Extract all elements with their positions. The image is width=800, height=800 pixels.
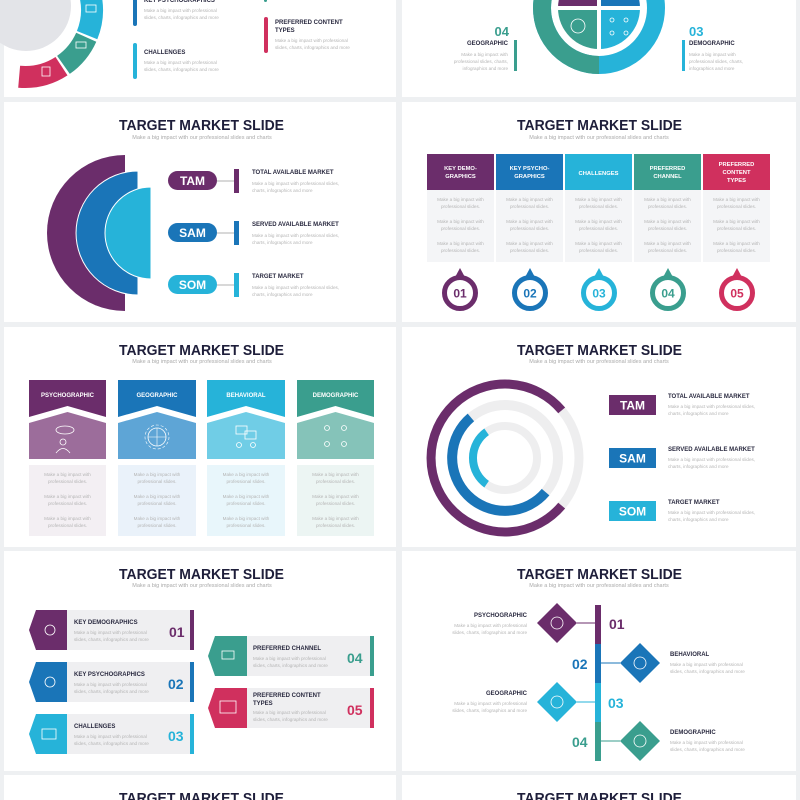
item 05: PREFERRED CONTENT — [253, 693, 321, 699]
card: demographic: Make a big impact with — [312, 494, 359, 499]
drop markers 01-05: 05 — [730, 286, 744, 300]
step 03 geographic: Make a big impact with professional — [454, 701, 527, 706]
item: SAM: Make a big impact with professional slides, — [252, 233, 339, 238]
item 05: slides, charts, infographics and more — [253, 717, 328, 722]
card: psychographic: PSYCHOGRAPHIC — [41, 393, 95, 399]
table: KEY DEMO- — [444, 166, 477, 172]
card: behavioral: professional slides. — [226, 523, 266, 528]
item 03: slides, charts, infographics and more — [74, 741, 149, 746]
drop markers 01-05 — [444, 268, 752, 308]
card: behavioral: Make a big impact with — [223, 494, 270, 499]
table: PREFERRED — [650, 166, 685, 172]
item: SAM: SERVED AVAILABLE MARKET — [668, 447, 755, 453]
slide: top-left partial donut — [0, 0, 396, 97]
table: professional slides. — [579, 204, 618, 209]
item 05 — [208, 688, 374, 728]
item 03: Make a big impact with professional — [74, 734, 147, 739]
card: geographic: Make a big impact with — [134, 494, 181, 499]
drop markers 01-05: 03 — [592, 286, 606, 300]
text block: challenges: CHALLENGES — [144, 50, 185, 56]
item 05: TYPES — [253, 701, 273, 707]
item 03 — [29, 714, 194, 754]
item: TAM — [609, 394, 755, 416]
item 03: CHALLENGES — [74, 724, 115, 730]
table: professional slides. — [717, 226, 756, 231]
card: psychographic: Make a big impact with — [44, 494, 91, 499]
slide: bottom-right partial — [402, 775, 796, 800]
table: professional slides. — [510, 204, 549, 209]
step 01 psychographic — [452, 603, 625, 643]
table: Make a big impact with — [437, 241, 484, 246]
text block: key psychographics: Make a big impact with professional — [144, 8, 217, 13]
card: geographic: GEOGRAPHIC — [136, 393, 178, 399]
table: professional slides. — [441, 204, 480, 209]
text block: demographic 03: professional slides, charts, — [689, 59, 743, 64]
card: demographic: professional slides. — [316, 501, 355, 506]
slide: top-right partial circle — [402, 0, 796, 97]
item: SAM: charts, infographics and more — [252, 240, 313, 245]
table: CHALLENGES — [579, 171, 619, 177]
item: TAM: charts, infographics and more — [252, 188, 313, 193]
text block: preferred content types: TYPES — [275, 28, 295, 34]
text block: geographic 04: GEOGRAPHIC — [467, 41, 509, 47]
drop markers 01-05: 02 — [523, 286, 537, 300]
item: SOM: Make a big impact with professional slides, — [668, 510, 755, 515]
item 02: KEY PSYCHOGRAPHICS — [74, 672, 145, 678]
item: SAM: charts, infographics and more — [668, 464, 729, 469]
chart: quadrant circle — [542, 0, 656, 65]
item: SAM: SAM — [179, 226, 206, 240]
step 03 geographic — [452, 682, 624, 722]
table: Make a big impact with — [644, 241, 691, 246]
step 03 geographic: 03 — [608, 695, 624, 711]
text block: key psychographics: slides, charts, infographics and more — [144, 15, 219, 20]
step 02 behavioral: 02 — [572, 656, 588, 672]
card: behavioral: BEHAVIORAL — [226, 393, 266, 399]
item 05: 05 — [347, 702, 363, 718]
item: TAM — [168, 169, 339, 193]
slide: numbered tag list — [4, 551, 396, 771]
step 01 psychographic: PSYCHOGRAPHIC — [474, 613, 528, 619]
chart: concentric progress arcs — [431, 384, 579, 532]
item: SOM: Make a big impact with professional slides, — [252, 285, 339, 290]
item: SOM: SOM — [619, 504, 646, 518]
item 05: Make a big impact with professional — [253, 710, 326, 715]
step 01 psychographic: Make a big impact with professional — [454, 623, 527, 628]
step 03 geographic: GEOGRAPHIC — [486, 691, 528, 697]
step 04 demographic: slides, charts, infographics and more — [670, 747, 745, 752]
slide: concentric arcs TAM SAM SOM — [402, 327, 796, 547]
table: Make a big impact with — [506, 241, 553, 246]
card: behavioral: Make a big impact with — [223, 472, 270, 477]
item: SOM — [168, 273, 339, 297]
slide: diamond timeline — [402, 551, 796, 771]
title: TARGET MARKET SLIDE — [517, 118, 682, 134]
table: Make a big impact with — [437, 197, 484, 202]
item: SAM: Make a big impact with professional slides, — [668, 457, 755, 462]
text block: challenges — [133, 43, 219, 79]
step 01 psychographic: 01 — [609, 616, 625, 632]
card: psychographic: Make a big impact with — [44, 516, 91, 521]
item: SOM: SOM — [179, 278, 206, 292]
card: behavioral: professional slides. — [226, 479, 266, 484]
step 04 demographic: Make a big impact with professional — [670, 740, 743, 745]
text block: preferred content types: slides, charts, infographics and more — [275, 45, 350, 50]
item: TAM: TAM — [620, 398, 645, 412]
slide: bottom-left partial — [4, 775, 396, 800]
table: Make a big impact with — [644, 219, 691, 224]
item: TAM: Make a big impact with professional slides, — [668, 404, 755, 409]
text block: geographic 04: infographics and more — [463, 66, 508, 71]
step 04 demographic: 04 — [572, 734, 588, 750]
subtitle: Make a big impact with our professional slides and charts — [132, 583, 272, 589]
drop markers 01-05: 04 — [661, 286, 675, 300]
item: SOM — [609, 500, 755, 522]
card: demographic: professional slides. — [316, 523, 355, 528]
item 01: Make a big impact with professional — [74, 630, 147, 635]
item 01: 01 — [169, 624, 185, 640]
chart: nested semicircles — [47, 155, 151, 311]
slide: TAM SAM SOM semicircles — [4, 102, 396, 322]
table: Make a big impact with — [437, 219, 484, 224]
title: TARGET MARKET SLIDE — [517, 343, 682, 359]
text block: geographic 04: professional slides, charts, — [454, 59, 508, 64]
chart: donut segments — [0, 0, 103, 88]
item 03: 03 — [168, 728, 184, 744]
card: psychographic: professional slides. — [48, 501, 87, 506]
title: TARGET MARKET SLIDE — [119, 343, 284, 359]
item 04: Make a big impact with professional — [253, 656, 326, 661]
item: TAM: charts, infographics and more — [668, 411, 729, 416]
card: geographic — [118, 380, 196, 536]
table: CHANNEL — [653, 174, 682, 180]
title: TARGET MARKET SLIDE — [119, 118, 284, 134]
item: SAM: SAM — [619, 452, 646, 466]
table: professional slides. — [441, 248, 480, 253]
text block: preferred content types: PREFERRED CONTENT — [275, 20, 343, 26]
item: SOM: TARGET MARKET — [252, 274, 304, 280]
item 01: slides, charts, infographics and more — [74, 637, 149, 642]
item 02 — [29, 662, 194, 702]
table: Make a big impact with — [575, 197, 622, 202]
card: geographic: Make a big impact with — [134, 472, 181, 477]
item: SAM — [168, 221, 339, 245]
card: demographic: Make a big impact with — [312, 516, 359, 521]
text block: demographic 03 — [682, 24, 743, 71]
subtitle: Make a big impact with our professional slides and charts — [529, 135, 669, 141]
text block: preferred content types: Make a big impact with professional — [275, 38, 348, 43]
step 01 psychographic: slides, charts, infographics and more — [452, 630, 527, 635]
table: Make a big impact with — [506, 197, 553, 202]
table: professional slides. — [579, 226, 618, 231]
table: professional slides. — [579, 248, 618, 253]
item 02: slides, charts, infographics and more — [74, 689, 149, 694]
table: TYPES — [727, 178, 746, 184]
slide: five-column table — [402, 102, 796, 322]
card: behavioral — [207, 380, 285, 536]
item 02: Make a big impact with professional — [74, 682, 147, 687]
item: SOM: TARGET MARKET — [668, 500, 720, 506]
text block: geographic 04: 04 — [495, 24, 510, 39]
card: geographic: professional slides. — [137, 479, 177, 484]
card: behavioral: professional slides. — [226, 501, 266, 506]
table: CONTENT — [722, 170, 751, 176]
text block: preferred content types — [264, 0, 350, 53]
title: TARGET MARKET SLIDE — [517, 567, 682, 583]
subtitle: Make a big impact with our professional slides and charts — [529, 583, 669, 589]
table: professional slides. — [717, 204, 756, 209]
step 03 geographic: slides, charts, infographics and more — [452, 708, 527, 713]
card: geographic: professional slides. — [137, 501, 177, 506]
card: behavioral: Make a big impact with — [223, 516, 270, 521]
table: GRAPHICS — [445, 174, 476, 180]
text block: key psychographics — [133, 0, 219, 26]
step 02 behavioral: BEHAVIORAL — [670, 652, 710, 658]
card: demographic: professional slides. — [316, 479, 355, 484]
card: psychographic: professional slides. — [48, 523, 87, 528]
item: TAM: Make a big impact with professional slides, — [252, 181, 339, 186]
table: professional slides. — [648, 204, 687, 209]
item: TAM: TOTAL AVAILABLE MARKET — [252, 170, 334, 176]
item 01: KEY DEMOGRAPHICS — [74, 620, 138, 626]
card: psychographic — [29, 380, 106, 536]
table: GRAPHICS — [514, 174, 545, 180]
title: TARGET MARKET SLIDE — [119, 567, 284, 583]
item: SAM: SERVED AVAILABLE MARKET — [252, 222, 339, 228]
subtitle: Make a big impact with our professional slides and charts — [132, 135, 272, 141]
table: professional slides. — [648, 248, 687, 253]
item 04: slides, charts, infographics and more — [253, 663, 328, 668]
table: professional slides. — [717, 248, 756, 253]
table: Make a big impact with — [575, 219, 622, 224]
text block: geographic 04 — [454, 24, 517, 71]
text block: geographic 04: Make a big impact with — [461, 52, 508, 57]
table: professional slides. — [510, 226, 549, 231]
card: psychographic: Make a big impact with — [44, 472, 91, 477]
table: Make a big impact with — [713, 241, 760, 246]
card: psychographic: professional slides. — [48, 479, 87, 484]
text block: demographic 03: 03 — [689, 24, 703, 39]
card: geographic: professional slides. — [137, 523, 177, 528]
card: demographic: Make a big impact with — [312, 472, 359, 477]
item 04 — [208, 636, 374, 676]
item 01 — [29, 610, 194, 650]
card: demographic: DEMOGRAPHIC — [313, 393, 359, 399]
item 04: 04 — [347, 650, 363, 666]
item 04: PREFERRED CHANNEL — [253, 646, 321, 652]
step 04 demographic — [572, 721, 745, 761]
table: Make a big impact with — [575, 241, 622, 246]
text block: demographic 03: infographics and more — [689, 66, 735, 71]
item 02: 02 — [168, 676, 184, 692]
table: KEY PSYCHO- — [510, 166, 549, 172]
step 02 behavioral: slides, charts, infographics and more — [670, 669, 745, 674]
table: professional slides. — [510, 248, 549, 253]
subtitle: Make a big impact with our professional slides and charts — [529, 359, 669, 365]
item: SAM — [609, 447, 755, 469]
item: SOM: charts, infographics and more — [668, 517, 729, 522]
table: professional slides. — [441, 226, 480, 231]
step 04 demographic: DEMOGRAPHIC — [670, 730, 716, 736]
step 02 behavioral: Make a big impact with professional — [670, 662, 743, 667]
card: geographic: Make a big impact with — [134, 516, 181, 521]
slide: four segment cards — [4, 327, 396, 547]
table: PREFERRED — [719, 162, 754, 168]
table: Make a big impact with — [713, 219, 760, 224]
item: TAM: TOTAL AVAILABLE MARKET — [668, 394, 750, 400]
drop markers 01-05: 01 — [453, 286, 467, 300]
table: Make a big impact with — [506, 219, 553, 224]
text block: demographic 03: Make a big impact with — [689, 52, 736, 57]
table — [427, 154, 770, 262]
timeline bar — [595, 605, 601, 761]
card: demographic — [297, 380, 374, 536]
text block: challenges: Make a big impact with professional — [144, 60, 217, 65]
table: Make a big impact with — [713, 197, 760, 202]
text block: challenges: slides, charts, infographics and more — [144, 67, 219, 72]
step 02 behavioral — [572, 643, 745, 683]
table: professional slides. — [648, 226, 687, 231]
table: Make a big impact with — [644, 197, 691, 202]
item: TAM: TAM — [180, 174, 205, 188]
text block: demographic 03: DEMOGRAPHIC — [689, 41, 735, 47]
item: SOM: charts, infographics and more — [252, 292, 313, 297]
subtitle: Make a big impact with our professional slides and charts — [132, 359, 272, 365]
